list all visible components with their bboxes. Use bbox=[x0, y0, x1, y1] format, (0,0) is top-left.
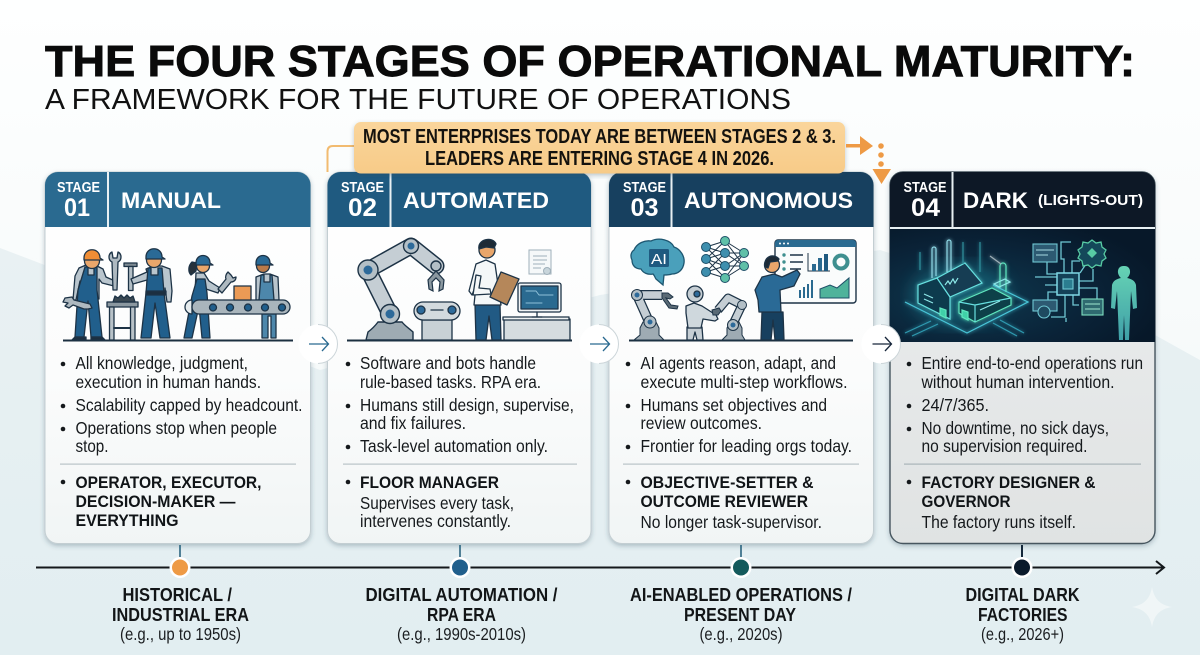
text block: stage 3 bullets: AI agents reason, adapt, and bbox=[640, 353, 836, 373]
humanoid robot bbox=[686, 286, 718, 340]
callout: enterprises today: MOST ENTERPRISES TODAY ARE BETWEEN STAGES 2 & 3. bbox=[363, 125, 836, 148]
era label: AI-enabled: (e.g., 2020s) bbox=[700, 624, 782, 644]
era label: historical: INDUSTRIAL ERA bbox=[112, 605, 249, 625]
supervisor with clipboard bbox=[469, 239, 519, 340]
header: stage 4: DARK bbox=[963, 188, 1028, 213]
icon: AI brain bbox=[631, 239, 684, 285]
era label: digital dark factories bbox=[966, 585, 1080, 644]
small robot arm left bbox=[632, 290, 678, 340]
text block: stage 3 bullets: OBJECTIVE-SETTER & bbox=[640, 473, 814, 492]
era label: AI-enabled bbox=[630, 585, 852, 644]
monitor and desk bbox=[503, 283, 570, 340]
era label: AI-enabled: AI-ENABLED OPERATIONS / bbox=[630, 585, 852, 605]
panel: stage 2 automated bbox=[328, 172, 591, 544]
illustration: factory workers bbox=[63, 249, 293, 340]
text block: stage 4 bullets: The factory runs itself. bbox=[922, 512, 1076, 532]
era label: historical: (e.g., up to 1950s) bbox=[120, 624, 241, 644]
text block: stage 4 bullets: without human intervention. bbox=[921, 372, 1114, 392]
era label: digital dark factories: (e.g., 2026+) bbox=[981, 624, 1064, 644]
era label: digital automation: (e.g., 1990s-2010s) bbox=[397, 624, 526, 644]
header: stage 3 bbox=[609, 172, 874, 227]
text block: stage 1 bullets: stop. bbox=[76, 436, 108, 456]
icon: neural network bbox=[702, 236, 748, 282]
hammer bbox=[124, 263, 137, 290]
era label: historical bbox=[112, 585, 249, 644]
text block: stage 2 bullets: and fix failures. bbox=[360, 413, 466, 433]
callout: enterprises today: LEADERS ARE ENTERING STAGE 4 IN 2026. bbox=[425, 147, 774, 170]
panel: stage 3 autonomous bbox=[609, 172, 874, 544]
text block: stage 3 bullets: Humans set objectives and bbox=[640, 395, 827, 415]
text block: stage 1 bullets: Operations stop when people bbox=[76, 418, 277, 438]
panel: stage 4 dark bbox=[890, 172, 1155, 544]
worker at conveyor bbox=[256, 256, 279, 338]
arrow between stages 1 and 2 bbox=[298, 324, 338, 364]
text block: stage 1 bullets: OPERATOR, EXECUTOR, bbox=[76, 473, 262, 492]
text block: stage 2 bullets: Task-level automation only. bbox=[360, 436, 548, 456]
text block: stage 1 bullets bbox=[60, 353, 302, 530]
header: stage 1: STAGE bbox=[57, 180, 100, 196]
text block: stage 2 bullets: intervenes constantly. bbox=[360, 511, 511, 531]
text block: stage 3 bullets: review outcomes. bbox=[640, 413, 762, 433]
text block: stage 3 bullets: Frontier for leading orgs today. bbox=[640, 436, 852, 456]
factory wireframe bbox=[905, 240, 1028, 336]
era label: digital dark factories: DIGITAL DARK bbox=[966, 585, 1080, 605]
text block: stage 2 bullets bbox=[343, 353, 577, 531]
marker: stage 2 bbox=[450, 557, 470, 578]
text block: stage 4 bullets bbox=[904, 353, 1143, 532]
text block: stage 1 bullets: EVERYTHING bbox=[76, 511, 178, 530]
marker: stage 1 bbox=[170, 557, 190, 578]
header: stage 1: MANUAL bbox=[121, 188, 221, 213]
header: stage 3: STAGE bbox=[623, 180, 666, 196]
panel: stage 1 manual bbox=[45, 172, 310, 544]
text block: stage 1 bullets: Scalability capped by headcount. bbox=[76, 395, 302, 415]
worker with hammer bbox=[131, 249, 172, 338]
timeline bbox=[36, 545, 1164, 578]
text block: stage 3 bullets: No longer task-supervisor. bbox=[640, 512, 822, 532]
workbench bbox=[107, 295, 138, 340]
header: stage 3: 03 bbox=[630, 194, 658, 222]
text block: stage 1 bullets: All knowledge, judgment, bbox=[76, 353, 248, 373]
text block: stage 2 bullets: Humans still design, supervise, bbox=[360, 395, 574, 415]
era label: historical: HISTORICAL / bbox=[122, 585, 232, 605]
conveyor belt with box bbox=[185, 286, 290, 314]
text block: stage 1 bullets: DECISION-MAKER — bbox=[76, 492, 236, 511]
subtitle: A FRAMEWORK FOR THE FUTURE OF OPERATIONS bbox=[45, 84, 791, 116]
worker with wrench, conveyor side bbox=[184, 256, 236, 338]
header: stage 2: STAGE bbox=[341, 180, 384, 196]
marker: stage 4 bbox=[1012, 557, 1032, 578]
small robot arm right bbox=[712, 298, 746, 340]
analyst pointing bbox=[755, 256, 800, 340]
header: stage 2 bbox=[328, 172, 591, 227]
header: stage 4 bbox=[890, 172, 1155, 229]
text block: stage 4 bullets: Entire end-to-end operations run bbox=[922, 353, 1143, 373]
header: stage 1 bbox=[45, 172, 310, 227]
dashboard bbox=[775, 240, 856, 303]
era label: digital dark factories: FACTORIES bbox=[978, 605, 1068, 625]
illustration: AI, robots and analyst bbox=[629, 236, 856, 340]
text block: stage 3 bullets: execute multi-step workflows. bbox=[640, 372, 848, 392]
text block: stage 2 bullets: Software and bots handle bbox=[360, 353, 536, 373]
arrow between stages 3 and 4 bbox=[862, 324, 901, 364]
text block: stage 3 bullets bbox=[623, 353, 859, 532]
machine bbox=[414, 302, 460, 340]
arrow: callout to stage 4 bbox=[846, 136, 891, 184]
human silhouette bbox=[1111, 266, 1137, 340]
text block: stage 2 bullets: rule-based tasks. RPA era. bbox=[360, 372, 541, 392]
callout: enterprises today bbox=[354, 122, 845, 174]
text block: stage 3 bullets: OUTCOME REVIEWER bbox=[640, 492, 808, 511]
era label: digital automation: RPA ERA bbox=[427, 605, 496, 625]
header: stage 1: 01 bbox=[64, 194, 90, 222]
icon: sparkle bbox=[1132, 587, 1172, 627]
title: THE FOUR STAGES OF OPERATIONAL MATURITY: bbox=[45, 37, 1135, 86]
illustration: robot arm and supervisor bbox=[347, 238, 572, 340]
circuit network bbox=[1033, 240, 1106, 322]
header: stage 4: (LIGHTS-OUT) bbox=[1038, 193, 1143, 209]
text block: stage 4 bullets: FACTORY DESIGNER & bbox=[922, 473, 1096, 492]
certificate document bbox=[529, 250, 551, 274]
header: stage 4: STAGE bbox=[904, 180, 947, 196]
header: stage 3: AUTONOMOUS bbox=[684, 188, 853, 213]
text block: stage 2 bullets: FLOOR MANAGER bbox=[360, 473, 499, 492]
icon: AI brain: AI bbox=[651, 251, 667, 268]
text block: stage 4 bullets: 24/7/365. bbox=[922, 395, 989, 415]
text block: stage 4 bullets: no supervision required. bbox=[922, 436, 1088, 456]
illustration: dark factory bbox=[890, 229, 1155, 342]
era label: digital automation: DIGITAL AUTOMATION / bbox=[366, 585, 558, 605]
text block: stage 4 bullets: No downtime, no sick days, bbox=[922, 418, 1109, 438]
text block: stage 1 bullets: execution in human hands. bbox=[76, 372, 261, 392]
text block: stage 2 bullets: Supervises every task, bbox=[360, 493, 514, 513]
callout connector left bbox=[328, 146, 356, 172]
header: stage 4: 04 bbox=[911, 194, 940, 222]
era label: AI-enabled: PRESENT DAY bbox=[684, 605, 796, 625]
text block: stage 4 bullets: GOVERNOR bbox=[922, 492, 1010, 511]
arrow between stages 2 and 3 bbox=[580, 324, 618, 364]
header: stage 2: AUTOMATED bbox=[403, 188, 549, 213]
marker: stage 3 bbox=[730, 557, 752, 578]
robot arm bbox=[358, 238, 444, 340]
era label: digital automation bbox=[366, 585, 558, 644]
worker with wrench bbox=[63, 250, 121, 340]
header: stage 2: 02 bbox=[348, 194, 377, 222]
